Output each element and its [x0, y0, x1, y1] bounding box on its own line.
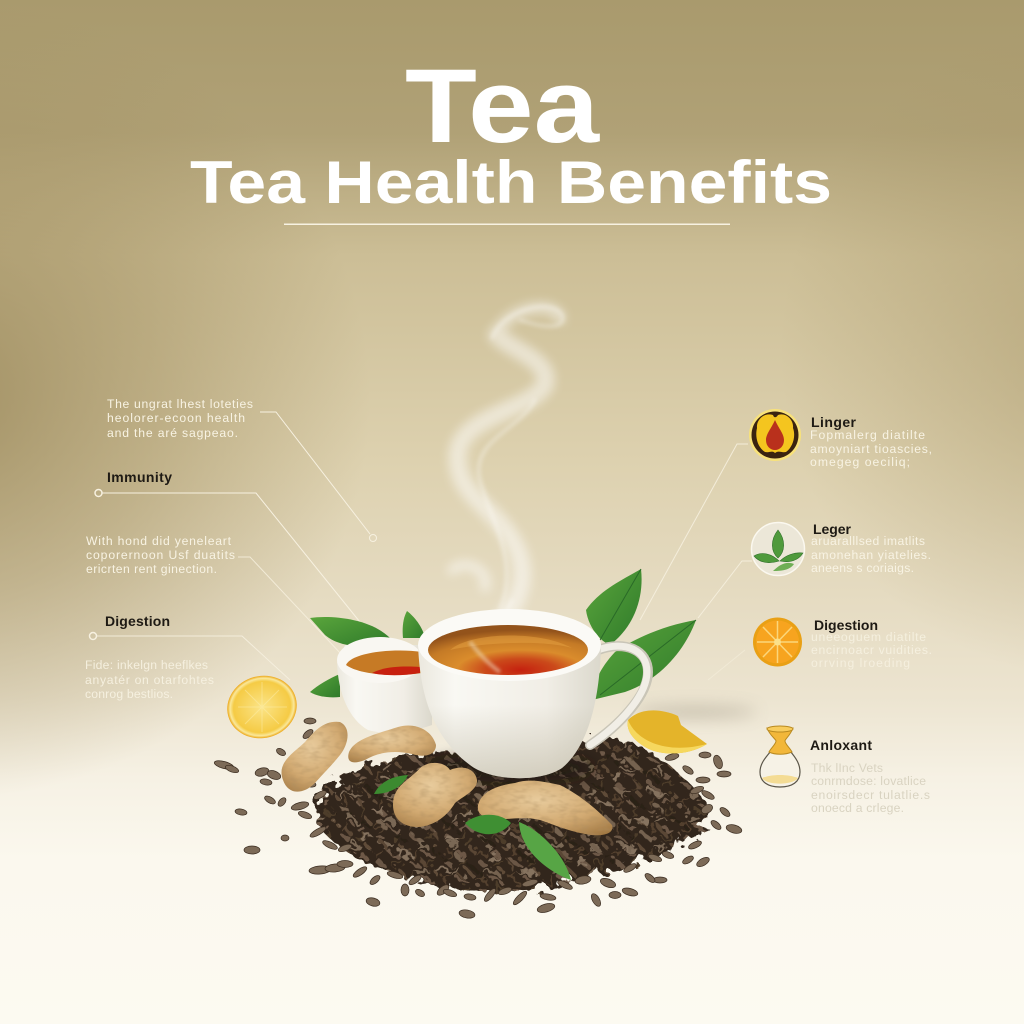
callout: digestion text: anyatér on otarfohtes — [85, 673, 214, 687]
text: Linger: amoyniart tioascies, — [810, 442, 932, 456]
lemon wedge — [628, 710, 707, 754]
left callouts — [85, 397, 376, 701]
steam — [452, 307, 563, 650]
large cup — [418, 609, 601, 778]
text: Digestion: encirnoacr vuidities. — [811, 643, 932, 657]
title: Tea — [405, 48, 601, 165]
shadow under large cup — [425, 754, 595, 782]
icon: leaf circle — [752, 522, 804, 576]
callout: immunity text: With hond did yeneleart — [86, 534, 232, 548]
text: Leger: aneens s coriaigs. — [811, 561, 914, 575]
connector: intro — [260, 412, 376, 542]
text: Antioxidant: Thk lInc Vets — [811, 761, 883, 775]
connector: immunity text — [238, 557, 342, 655]
text: Linger — [810, 414, 932, 469]
text: Digestion — [811, 617, 932, 670]
lemon half — [220, 668, 304, 746]
subtitle: Tea Health Benefits — [190, 149, 832, 216]
text: Antioxidant: onoecd a crlege. — [811, 801, 904, 815]
callout: intro text — [107, 397, 253, 440]
text: Digestion: orrving lroeding — [811, 656, 910, 670]
connector: Immunity — [95, 490, 368, 632]
right connectors — [640, 444, 752, 680]
text: Linger: Linger — [811, 414, 857, 430]
callout: digestion text: Fide: inkelgn heeflkes — [85, 658, 208, 672]
illustration: tea cups with ginger and leaves — [213, 569, 757, 919]
text: Linger: omegeg oeciliq; — [810, 455, 910, 469]
text: Antioxidant: Anloxant — [810, 737, 872, 753]
text: Antioxidant: conrmdose: lovatlice — [811, 774, 926, 788]
text: Linger: Fopmalerg diatilte — [810, 428, 925, 442]
small cup — [337, 637, 432, 733]
text: Leger: aruaralllsed imatlits — [811, 534, 925, 548]
callout: intro text: and the aré sagpeao. — [107, 426, 238, 440]
callout: immunity text — [86, 534, 235, 576]
callout: digestion text — [85, 658, 214, 701]
callout: immunity text: ericrten rent ginection. — [86, 562, 217, 576]
connector: Digestion — [90, 632, 290, 680]
text: Digestion: uneeoguem diatilte — [811, 630, 926, 644]
callout: intro text: heolorer-ecoon health — [107, 411, 245, 425]
green garnish leaves — [374, 775, 571, 880]
icon: yellow circle with drop — [749, 409, 801, 461]
text: Leger: Leger — [813, 521, 852, 537]
text: Antioxidant: enoirsdecr tulatlie.s — [811, 788, 930, 802]
heading: Immunity: Immunity — [107, 469, 172, 485]
handle — [590, 646, 648, 745]
icon: glass flask — [760, 726, 800, 787]
text: Digestion: Digestion — [814, 617, 878, 633]
callout: digestion text: conrog bestlios. — [85, 687, 173, 701]
icon: orange slice — [753, 618, 802, 666]
ginger roots — [281, 722, 612, 835]
text: Leger — [811, 521, 931, 575]
callout: intro text: The ungrat lhest loteties — [107, 397, 253, 411]
heading: Digestion: Digestion — [105, 613, 170, 629]
text: Antioxidant — [810, 737, 930, 815]
title — [190, 48, 832, 216]
cup shadow — [633, 706, 757, 718]
callout: immunity text: coporernoon Usf duatits — [86, 548, 235, 562]
tea leaf pile — [213, 718, 743, 919]
text: Leger: amonehan yiatelies. — [811, 548, 931, 562]
back leaves — [310, 569, 696, 700]
